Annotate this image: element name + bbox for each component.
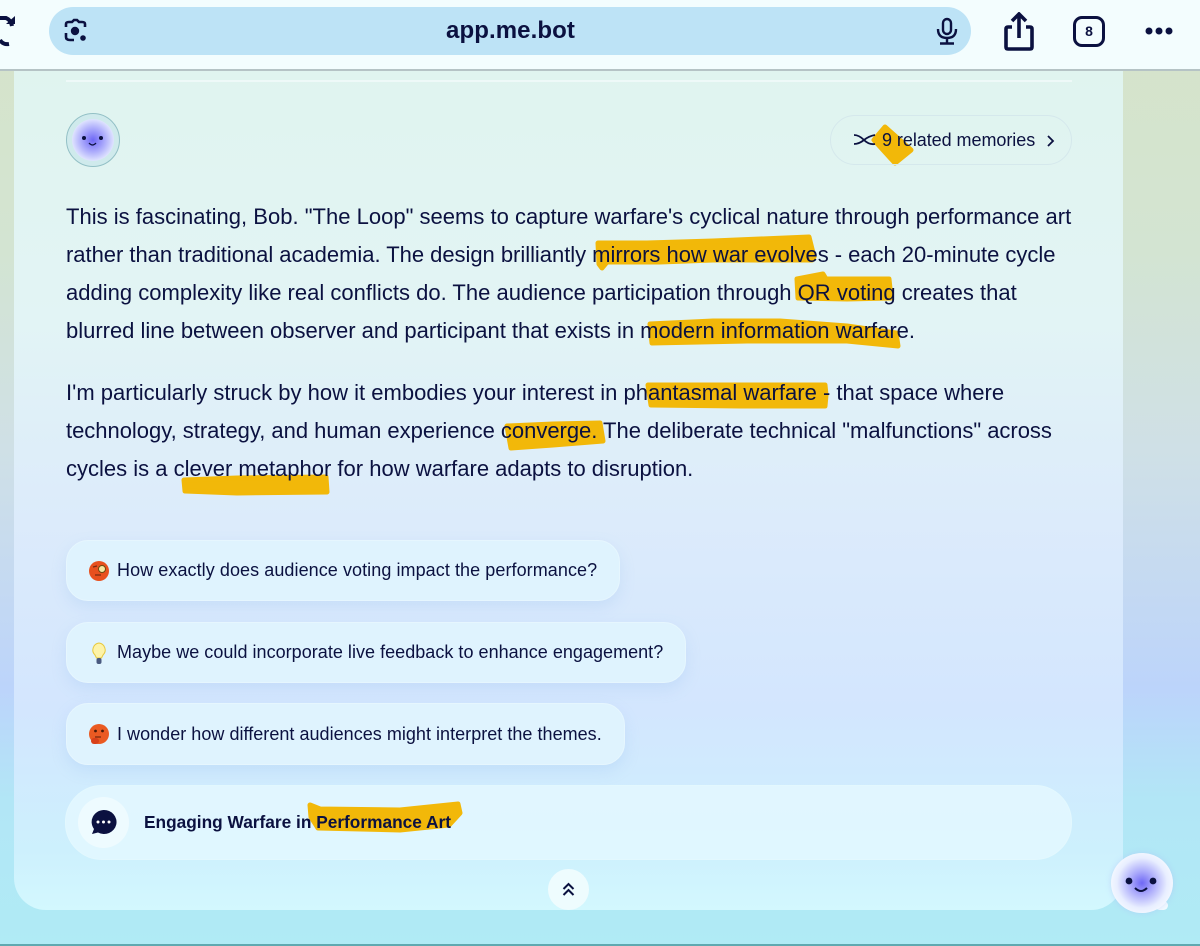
highlight: 9 related xyxy=(874,127,911,163)
icon: thinking face xyxy=(89,724,109,744)
highlight: modern information warfare xyxy=(650,321,898,346)
icon: share xyxy=(1004,12,1034,51)
text block: second paragraph xyxy=(66,380,1052,481)
icon: monocle face xyxy=(89,561,109,581)
chip text: I wonder how different audiences might interpret the themes. xyxy=(117,724,602,744)
divider line xyxy=(66,80,1072,82)
text block: first paragraph: rather than traditional academia. The design brilliantly mirrors how war evolves - each 20-minute cycle xyxy=(66,242,1055,267)
pill label: 9 related memories xyxy=(882,130,1035,150)
highlight: Performance Art xyxy=(310,804,460,830)
icon: tabs count: 8 xyxy=(1085,23,1093,39)
highlight: QR voting xyxy=(797,274,891,299)
icon: chat bubble xyxy=(78,797,129,848)
icon: more dots xyxy=(1146,28,1172,34)
title text: Engaging Warfare in Performance Art xyxy=(144,812,451,832)
icon: reload xyxy=(0,16,15,46)
icon: related arrows xyxy=(854,134,876,146)
highlight: mirrors how war evolves xyxy=(598,237,814,268)
chip text: Maybe we could incorporate live feedback to enhance engagement? xyxy=(117,642,663,662)
text block: first paragraph xyxy=(66,204,1072,343)
bottom edge xyxy=(0,944,1200,946)
address bar xyxy=(49,7,971,55)
highlight: phantasmal warfare xyxy=(648,385,826,406)
icon: tabs count xyxy=(1073,16,1105,47)
suggestion chip: audience voting xyxy=(66,540,620,608)
text block: second paragraph: I'm particularly struck by how it embodies your interest in phantasmal warfare - that space where xyxy=(66,380,1004,405)
text block: first paragraph: blurred line between observer and participant that exists in modern information warfare. xyxy=(66,318,915,343)
highlight: converge xyxy=(507,423,603,448)
url text: app.me.bot xyxy=(446,17,575,44)
text block: first paragraph: adding complexity like real conflicts do. The audience participation through QR voting creates that xyxy=(66,280,1017,305)
text block: second paragraph: cycles is a clever metaphor for how warfare adapts to disruption. xyxy=(66,456,693,481)
related memories pill xyxy=(830,115,1072,165)
highlight: clever metaphor xyxy=(184,477,327,493)
text block: first paragraph: This is fascinating, Bob. "The Loop" seems to capture warfare's cyclical nature through performance art xyxy=(66,204,1071,229)
icon: chevron xyxy=(1047,135,1054,147)
icon: bot avatar xyxy=(66,113,120,167)
suggestion chip: live feedback xyxy=(66,622,686,689)
icon: microphone xyxy=(936,18,958,45)
icon: light bulb xyxy=(92,642,106,664)
chip text: How exactly does audience voting impact the performance? xyxy=(117,560,597,580)
browser toolbar xyxy=(0,0,1200,71)
icon: lens xyxy=(64,18,86,42)
text block: second paragraph: technology, strategy, and human experience converge. The deliberate technical "malfunctions" across xyxy=(66,418,1052,443)
icon: double chevron xyxy=(562,882,574,896)
conversation title bar xyxy=(65,785,1072,860)
button: scroll up xyxy=(548,869,589,910)
icon: floating bot xyxy=(1110,852,1174,914)
suggestion chip: audiences interpret xyxy=(66,703,625,770)
